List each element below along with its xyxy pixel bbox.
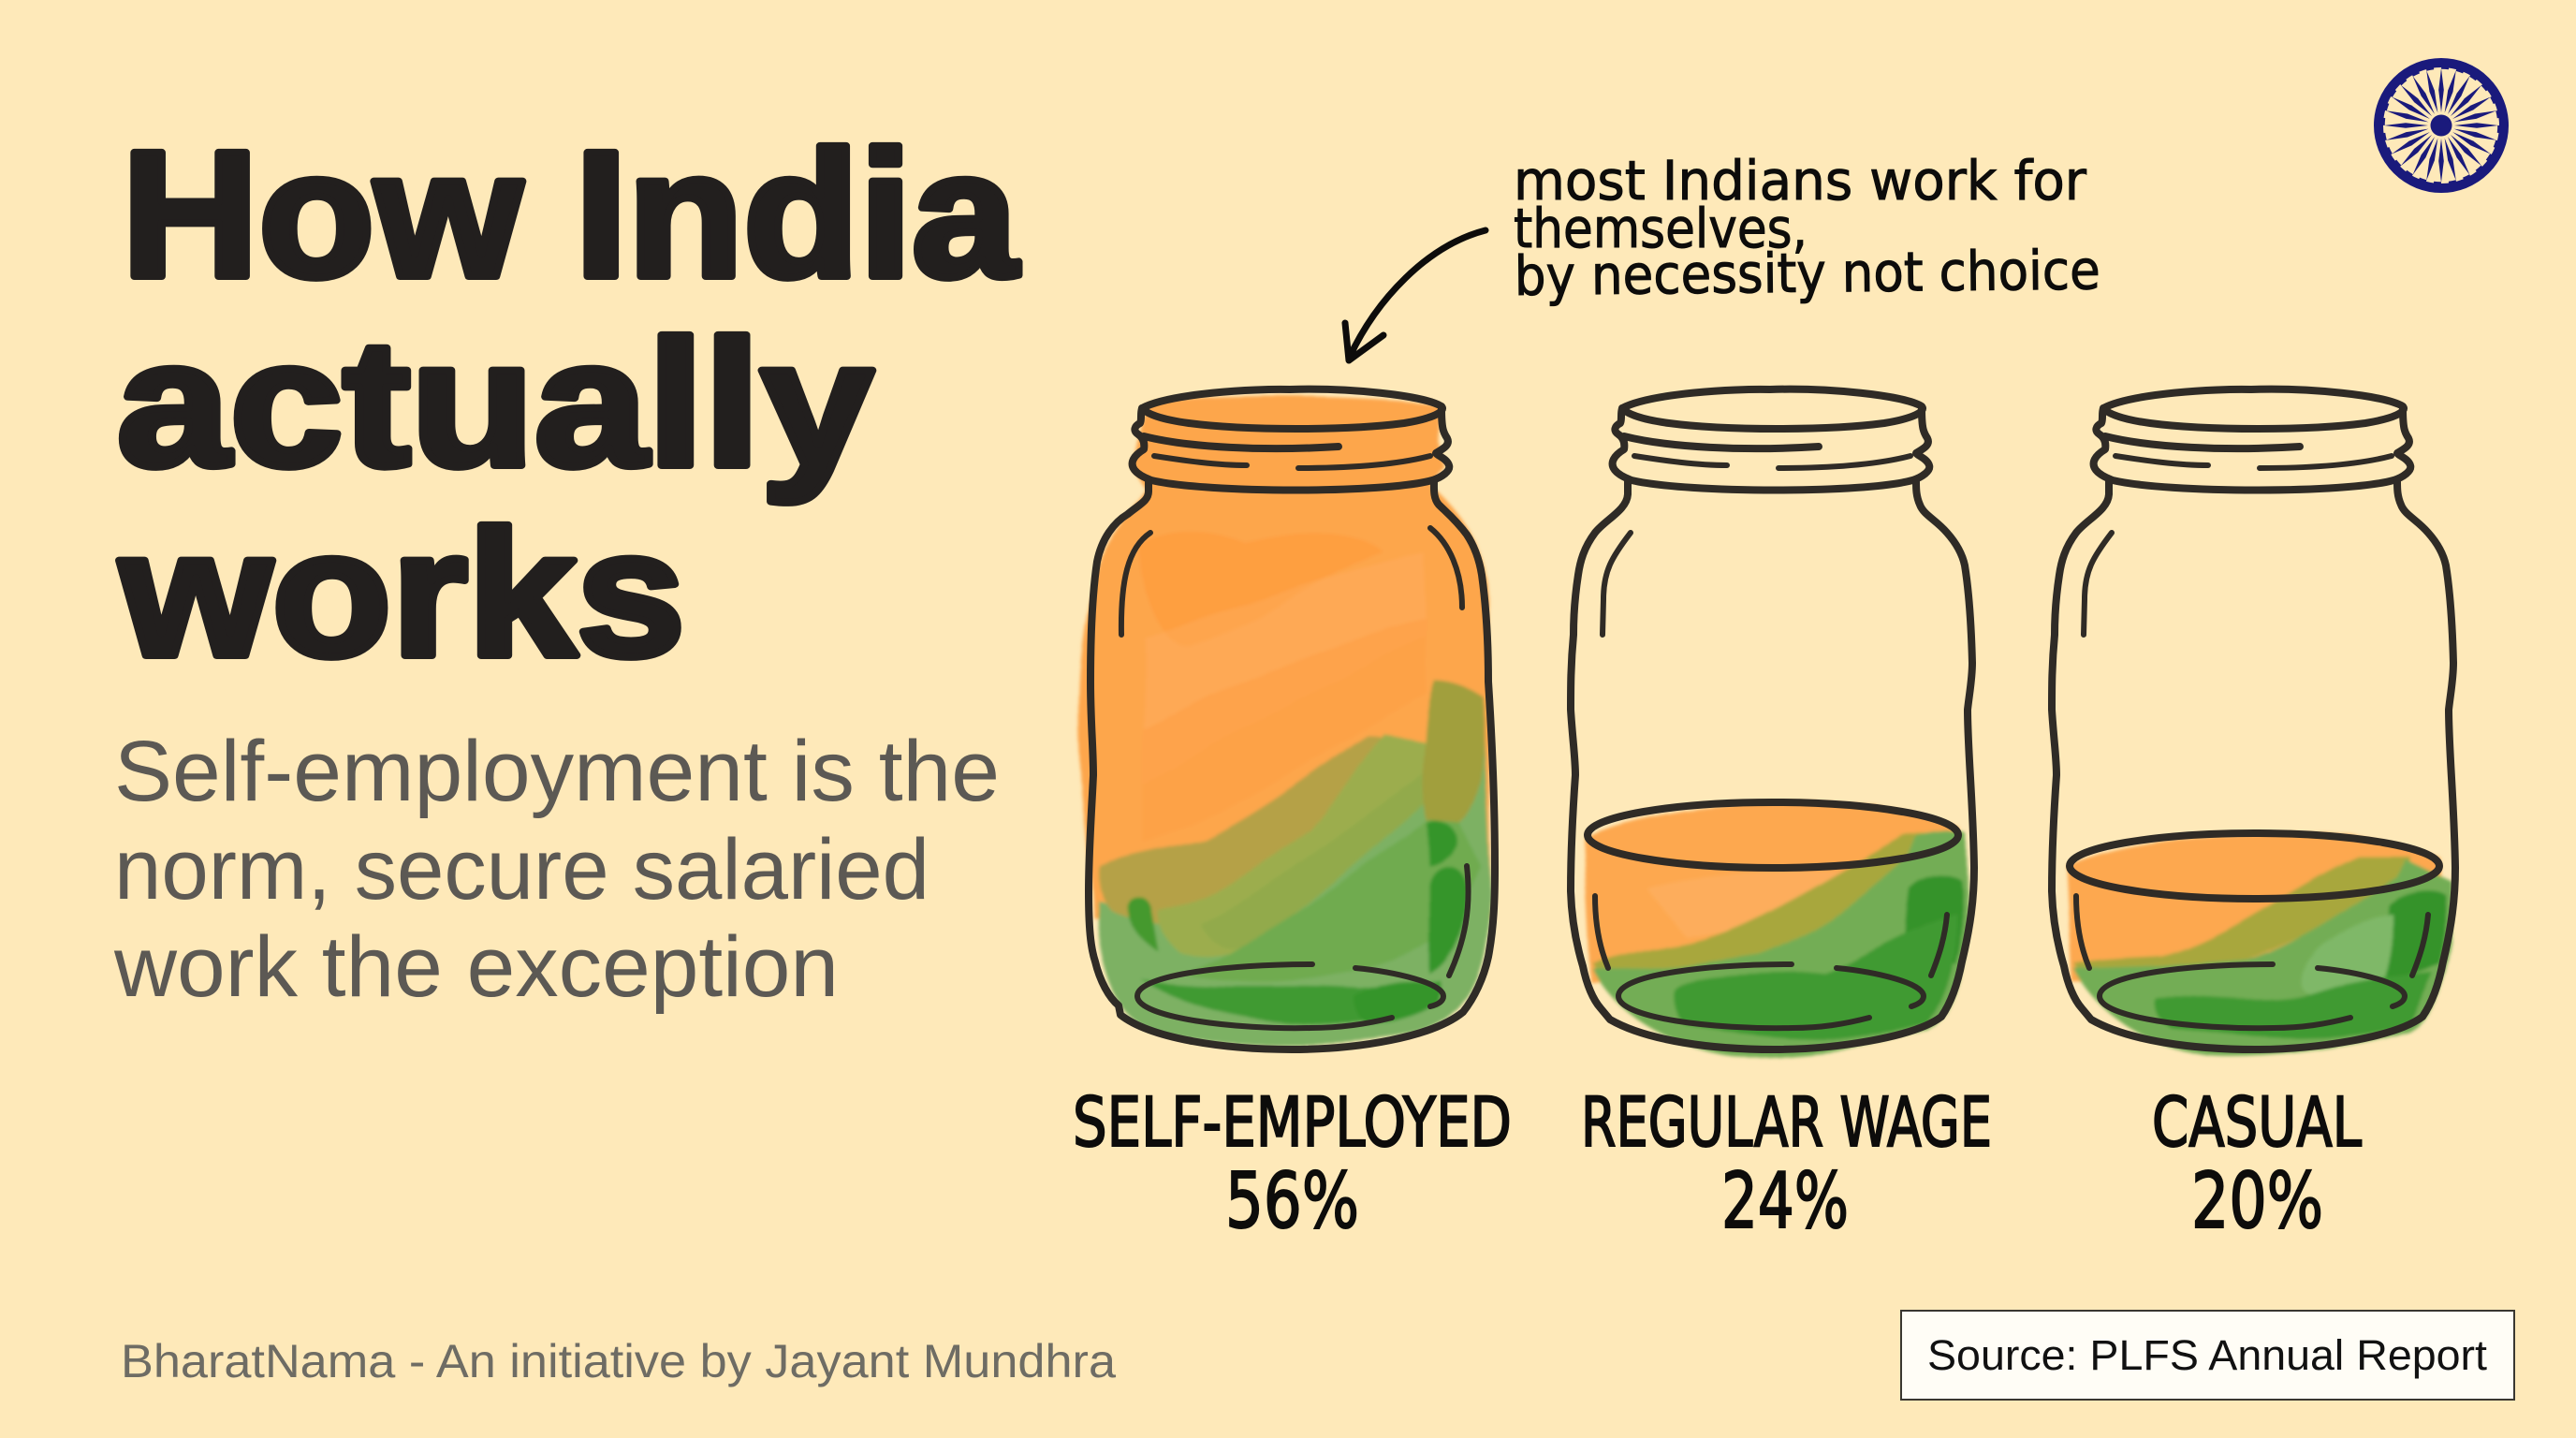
source box [1901, 1311, 2514, 1400]
label: self-employed 56% [1073, 1083, 1512, 1246]
label: regular wage 24% [1581, 1083, 1992, 1246]
jar: self-employed 56% [1079, 389, 1495, 1049]
subtitle: work the exception [113, 919, 839, 1015]
callout annotation: themselves, [1514, 197, 1808, 260]
label: regular wage 24%: 24% [1721, 1157, 1849, 1246]
label: regular wage 24%: REGULAR WAGE [1581, 1083, 1992, 1163]
subtitle [113, 724, 1000, 1015]
jar: regular wage 24% [1571, 389, 1974, 1057]
callout annotation: by necessity not choice [1514, 238, 2100, 308]
label: casual 20%: 20% [2191, 1157, 2323, 1246]
callout annotation [1514, 149, 2100, 308]
label: casual 20% [2152, 1083, 2362, 1246]
callout annotation: most Indians work for [1514, 149, 2086, 213]
source box: Source: PLFS Annual Report [1927, 1331, 2488, 1379]
jar 3 outline [2052, 389, 2455, 1049]
label: self-employed 56%: 56% [1225, 1157, 1359, 1246]
arrow: callout to first jar [1345, 230, 1486, 360]
jar 2 watercolor fill [1584, 801, 1969, 1057]
title: How India [122, 113, 1018, 315]
jar: casual 20% [2052, 389, 2455, 1057]
jar 3 watercolor fill [2067, 832, 2452, 1057]
subtitle: norm, secure salaried [114, 822, 929, 917]
title [117, 113, 1018, 694]
icon: Ashoka Chakra [2378, 63, 2504, 188]
title: works [119, 492, 685, 694]
jar 2 outline [1571, 389, 1974, 1049]
title: actually [117, 302, 873, 504]
footer credit: BharatNama - An initiative by Jayant Mundhra [121, 1335, 1116, 1387]
label: self-employed 56%: SELF-EMPLOYED [1073, 1083, 1512, 1163]
subtitle: Self-employment is the [114, 724, 1000, 819]
label: casual 20%: CASUAL [2152, 1083, 2362, 1163]
jar 1 outline [1089, 389, 1495, 1049]
jar 1 watercolor fill [1079, 396, 1490, 1044]
